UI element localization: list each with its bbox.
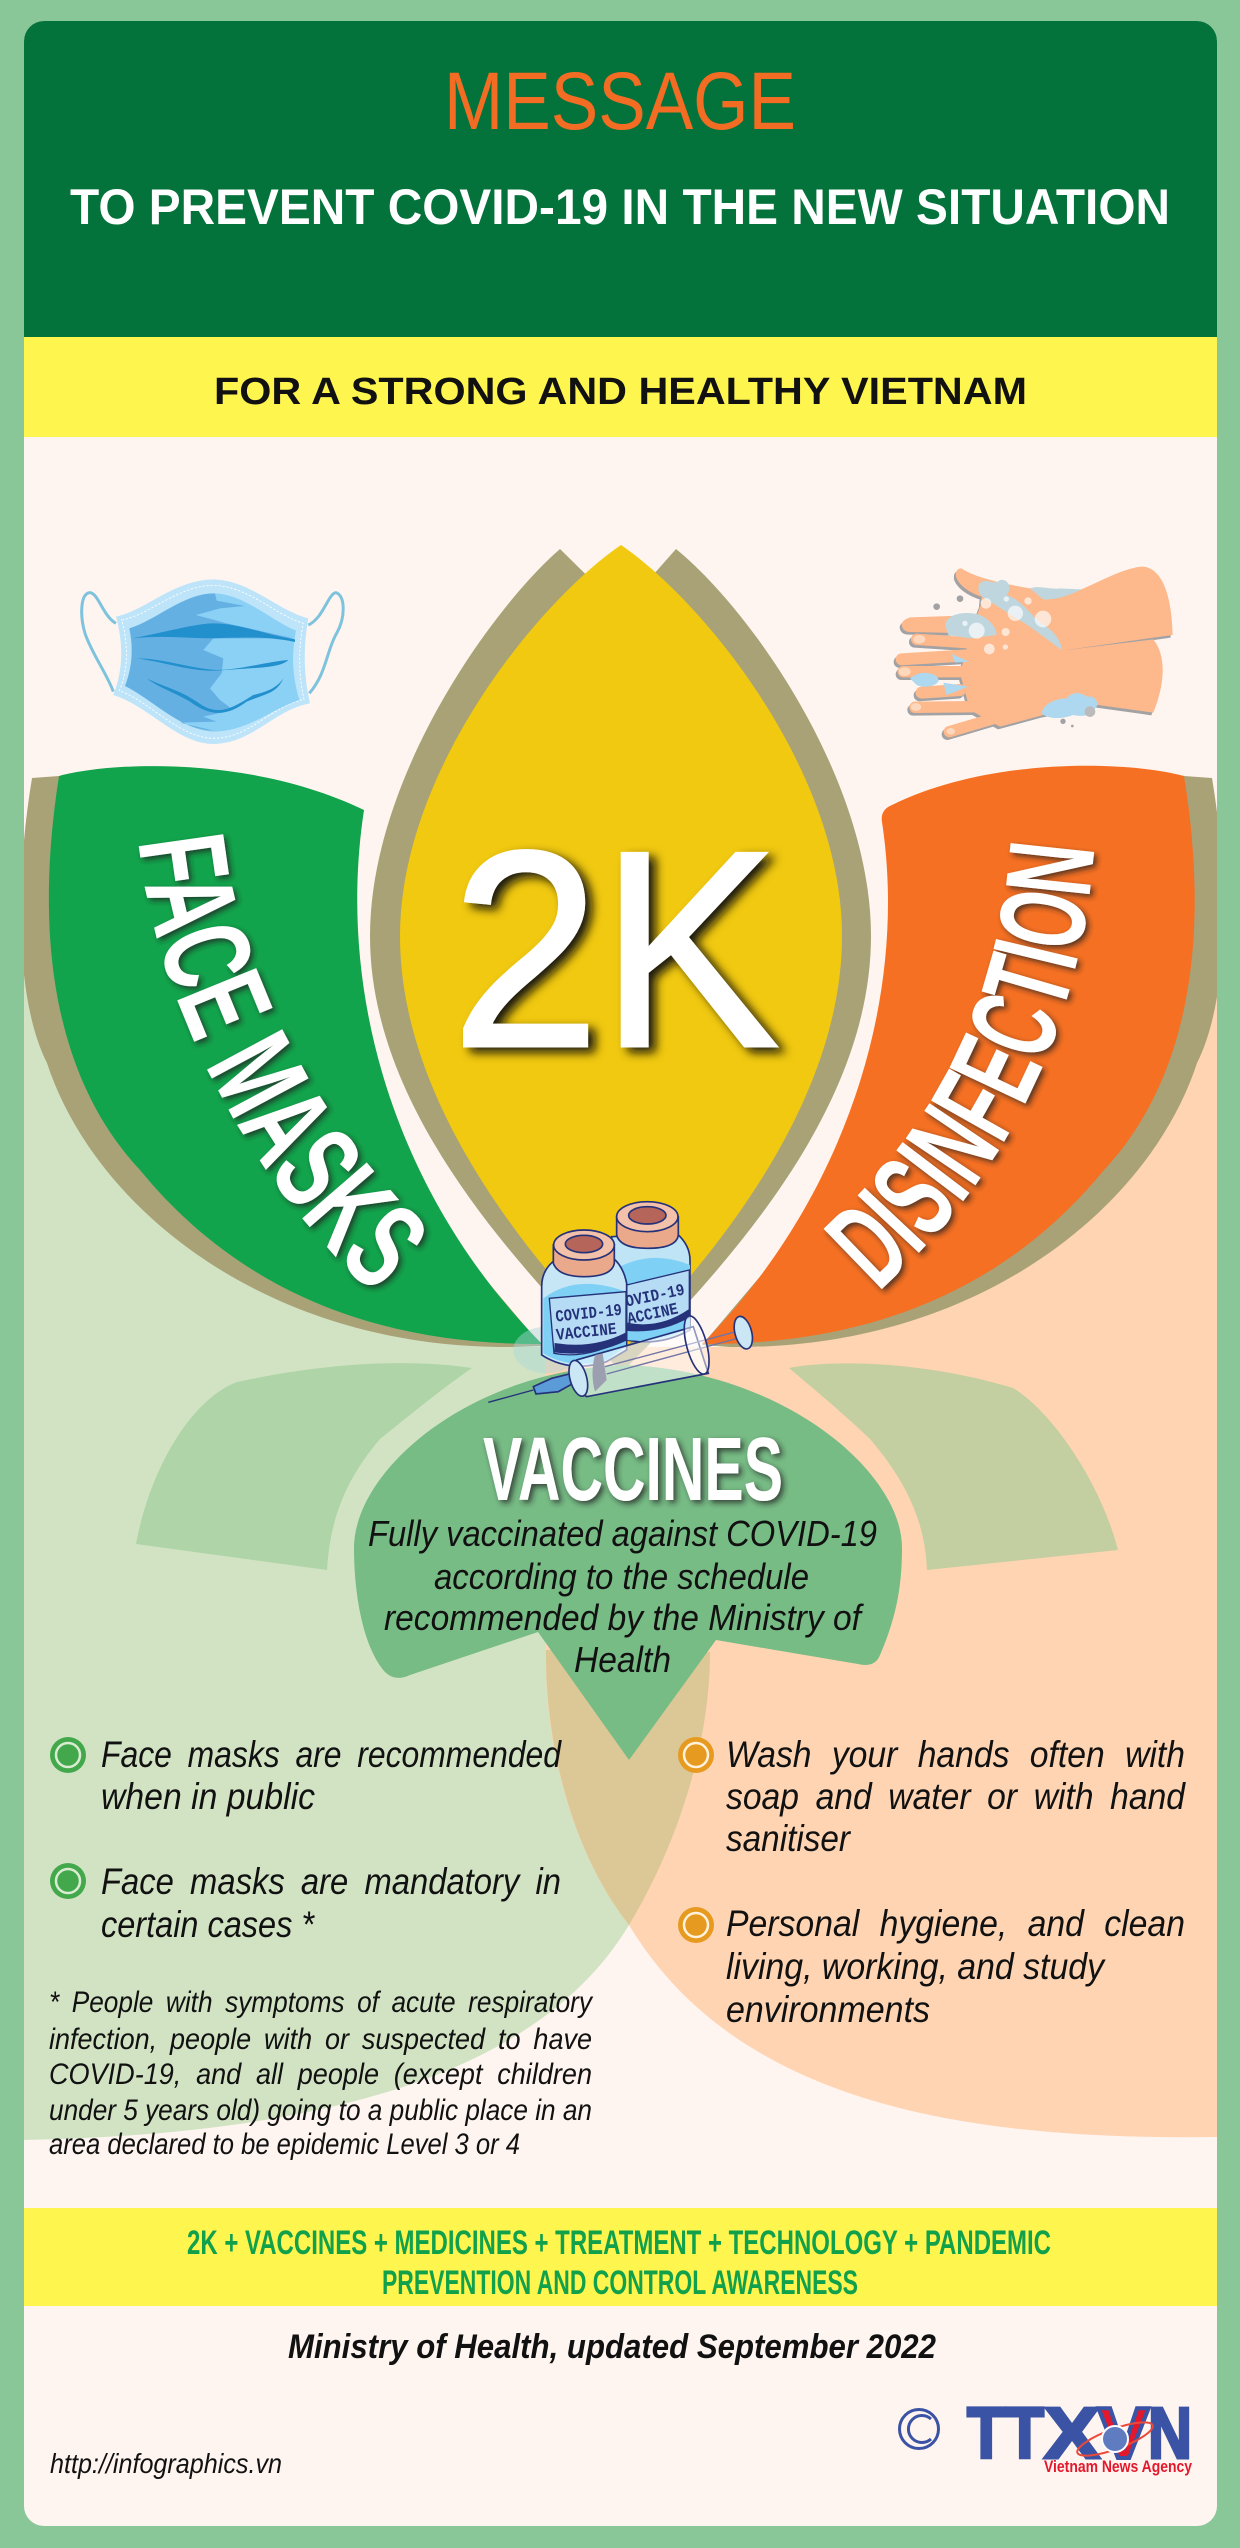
front vial: VACCINE bbox=[555, 1321, 618, 1346]
right bullets bbox=[678, 1734, 1186, 2030]
peach background shape bbox=[546, 930, 1217, 2137]
petal: face masks bbox=[24, 766, 541, 1347]
bullet: hygiene bbox=[678, 1907, 714, 1943]
footnote: * People with symptoms of acute respiratory bbox=[49, 1986, 594, 2019]
icon: washing hands bbox=[899, 567, 1173, 735]
subtitle band bbox=[24, 337, 1217, 437]
heading: to prevent COVID-19: TO PREVENT COVID-19 IN THE NEW SITUATION bbox=[70, 179, 1170, 235]
text: hygiene: Personal hygiene, and clean bbox=[726, 1903, 1185, 1944]
light green background shape bbox=[24, 976, 629, 2140]
website url: http://infographics.vn bbox=[50, 2448, 282, 2479]
footnote: infection, people with or suspected to have bbox=[49, 2023, 592, 2056]
text: wash hands: Wash your hands often with bbox=[726, 1734, 1185, 1775]
front vial: COVID-19 bbox=[555, 1302, 623, 1328]
source: Ministry of Health, updated September 2022 bbox=[288, 2328, 936, 2366]
logo: TTXVN: N bbox=[1148, 2394, 1192, 2474]
footnote: under 5 years old) going to a public place in an bbox=[49, 2094, 592, 2127]
band text bbox=[187, 2224, 1051, 2302]
hands bbox=[902, 567, 1173, 732]
footnote bbox=[49, 1986, 594, 2161]
icon: vaccine vials and syringe bbox=[488, 1202, 756, 1402]
text: wash hands: sanitiser bbox=[726, 1818, 852, 1859]
overlap of background shapes bbox=[546, 1650, 710, 1925]
logo: TTXVN: Vietnam News Agency bbox=[1044, 2457, 1192, 2476]
vaccine description: Fully vaccinated against COVID-19 bbox=[368, 1513, 877, 1554]
subtitle: FOR A STRONG AND HEALTHY VIETNAM bbox=[214, 371, 1027, 413]
icon: face mask bbox=[82, 579, 343, 744]
vaccine description: recommended by the Ministry of bbox=[384, 1597, 865, 1638]
front vial bbox=[542, 1230, 627, 1366]
band text: PREVENTION AND CONTROL AWARENESS bbox=[382, 2264, 858, 2302]
text: masks in public: when in public bbox=[101, 1776, 315, 1817]
text: hygiene: living, working, and study bbox=[726, 1946, 1106, 1987]
text: masks in public: Face masks are recommended bbox=[101, 1734, 562, 1775]
label: VACCINES: VACCINES bbox=[483, 1420, 783, 1520]
petal: 2K bbox=[370, 545, 871, 1372]
text: masks in public bbox=[101, 1734, 562, 1817]
label: 2K: 2K bbox=[451, 794, 779, 1106]
logo: TTXVN: X bbox=[1044, 2394, 1100, 2474]
logo: TTXVN: V bbox=[1098, 2394, 1149, 2474]
bottom yellow band bbox=[24, 2208, 1217, 2306]
logo: TTXVN: TT bbox=[967, 2394, 1044, 2474]
back vial: OVID-19 bbox=[624, 1281, 687, 1313]
vaccine leaf bbox=[354, 1365, 902, 1760]
footnote: area declared to be epidemic Level 3 or 4 bbox=[49, 2128, 520, 2161]
left side leaf bbox=[136, 1363, 472, 1570]
right side leaf bbox=[789, 1363, 1118, 1570]
text: masks mandatory: Face masks are mandatory in bbox=[101, 1861, 561, 1902]
bullet: wash hands bbox=[678, 1737, 714, 1773]
label: FACE MASKS: FACE MASKS bbox=[138, 834, 430, 1292]
bullet: masks in public bbox=[50, 1737, 86, 1773]
left bullets bbox=[50, 1734, 562, 1945]
text: hygiene bbox=[726, 1903, 1185, 2030]
petal: disinfection bbox=[702, 766, 1217, 1347]
finger nails bbox=[899, 635, 955, 735]
bullet: masks mandatory bbox=[50, 1863, 86, 1899]
text: masks mandatory bbox=[101, 1861, 561, 1945]
back vial bbox=[612, 1202, 690, 1342]
logo: TTXVN bbox=[967, 2394, 1192, 2476]
label: DISINFECTION: DISINFECTION bbox=[824, 842, 1102, 1295]
text: wash hands: soap and water or with hand bbox=[726, 1776, 1186, 1817]
text: hygiene: environments bbox=[726, 1989, 930, 2030]
text: wash hands bbox=[726, 1734, 1186, 1859]
syringe bbox=[488, 1313, 756, 1402]
icon: copyright bbox=[900, 2410, 938, 2448]
hands shadow bbox=[900, 569, 1171, 734]
soap foam bbox=[945, 580, 1082, 650]
title: MESSAGE: MESSAGE bbox=[444, 56, 796, 147]
soap bubbles bbox=[962, 596, 1051, 654]
vaccine description: according to the schedule bbox=[434, 1556, 809, 1597]
text: masks mandatory: certain cases * bbox=[101, 1904, 315, 1945]
back vial: ACCINE bbox=[626, 1301, 680, 1330]
footnote: COVID-19, and all people (except children bbox=[49, 2058, 592, 2091]
vaccine description bbox=[368, 1513, 877, 1680]
header band bbox=[24, 21, 1217, 337]
vaccine description: Health bbox=[574, 1639, 671, 1680]
